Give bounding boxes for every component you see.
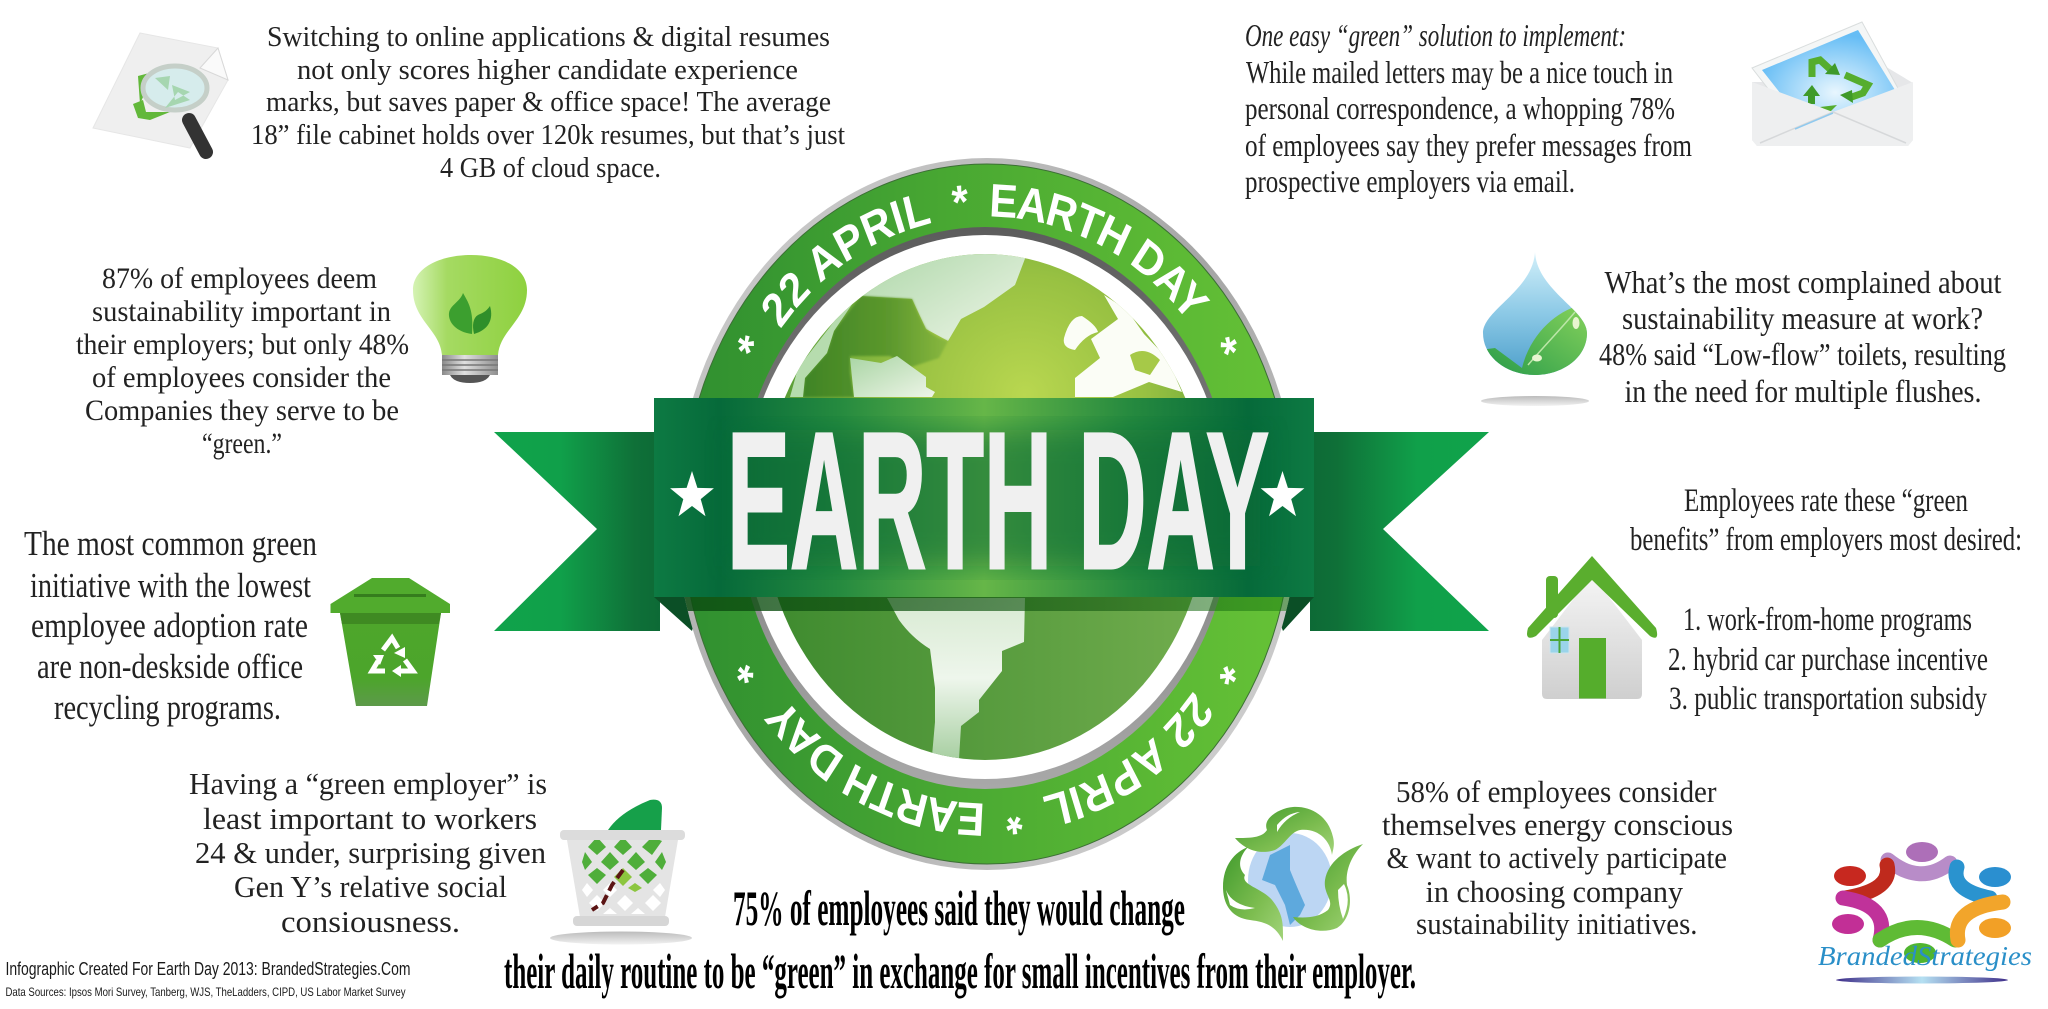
- text block: email solution: personal correspondence, a whopping 78%: [1245, 90, 1675, 126]
- icon: green house: [1527, 556, 1657, 699]
- callout: 75 percent incentive statement: 75% of employees said they would change: [733, 880, 1185, 936]
- text block: low-flow toilets: [1599, 264, 2006, 409]
- text block: online applications: not only scores higher candidate experience: [297, 54, 798, 86]
- icon: envelope with recycling letter: [1752, 22, 1913, 146]
- text block: recycling programs: are non-deskside office: [37, 647, 303, 686]
- text block: recycling programs: The most common green: [24, 524, 317, 563]
- star right: [1261, 471, 1304, 516]
- text block: online applications: [251, 21, 845, 184]
- text block: recycling programs: employee adoption rate: [31, 606, 308, 645]
- ribbon tail left: [494, 432, 660, 631]
- text block: email solution: While mailed letters may be a nice touch in: [1246, 54, 1673, 90]
- callout: 75 percent incentive statement: [504, 880, 1416, 999]
- logo: Branded Strategies: BrandedStrategies: [1818, 941, 2032, 971]
- ring text bottom: *: [737, 664, 754, 684]
- text block: energy conscious: sustainability initiatives.: [1416, 906, 1698, 941]
- ring text bottom: *: [1006, 816, 1022, 834]
- text block: sustainability importance: 87% of employees deem: [102, 262, 377, 295]
- text block: green employer: [189, 766, 547, 939]
- footer: credits: Data Sources: Ipsos Mori Survey, Tanberg, WJS, TheLadders, CIPD, US Labor Market Survey: [6, 985, 406, 999]
- ring text bottom: [737, 664, 1236, 836]
- text block: green benefits: [1630, 483, 2022, 717]
- text block: recycling programs: initiative with the lowest: [30, 566, 311, 605]
- text block: sustainability importance: Companies they serve to be: [85, 394, 399, 427]
- panel: central Earth Day emblem: [494, 158, 1489, 870]
- text block: email solution: [1245, 17, 1692, 199]
- text block: low-flow toilets: What’s the most complained about: [1604, 264, 2002, 300]
- icon: paper with magnifier: [93, 33, 228, 152]
- badge ring: [676, 158, 1298, 870]
- text block: energy conscious: 58% of employees consider: [1396, 774, 1717, 809]
- footer: credits: Infographic Created For Earth Day 2013: BrandedStrategies.Com: [6, 959, 410, 979]
- text block: online applications: Switching to online applications & digital resumes: [267, 21, 830, 53]
- ring text bottom: EARTH DAY: [764, 706, 982, 836]
- text block: online applications: 4 GB of cloud space.: [440, 152, 661, 184]
- text block: recycling programs: recycling programs.: [54, 688, 281, 727]
- ring text top: [738, 184, 1237, 356]
- ring text bottom: 22 APRIL: [1042, 692, 1212, 824]
- text block: recycling programs: [24, 524, 317, 727]
- panel: central Earth Day emblem: EARTH DAY: [727, 392, 1269, 610]
- banner shadow: [660, 597, 1310, 611]
- text block: green employer: consiousness.: [281, 904, 460, 939]
- banner: [654, 398, 1314, 597]
- text block: green employer: Having a “green employer” is: [189, 766, 547, 801]
- ribbon tail right: [1310, 432, 1489, 631]
- icon: recycling bin: [330, 578, 450, 706]
- logo: Branded Strategies: [1818, 842, 2032, 984]
- text block: email solution: One easy “green” solution to implement:: [1245, 17, 1626, 53]
- text block: green employer: 24 & under, surprising given: [195, 835, 546, 870]
- text block: online applications: 18” file cabinet holds over 120k resumes, but that’s just: [251, 119, 845, 151]
- star left: [670, 471, 714, 516]
- text block: online applications: marks, but saves paper & office space! The average: [266, 86, 831, 118]
- text block: energy conscious: [1382, 774, 1733, 941]
- text block: sustainability importance: “green.”: [202, 427, 282, 460]
- ring text top: *: [952, 186, 968, 204]
- icon: earth with recycling leaves: [1223, 807, 1363, 941]
- text block: sustainability importance: [76, 262, 409, 460]
- icon: water drop with leaf: [1480, 252, 1595, 406]
- ring text top: EARTH DAY: [992, 184, 1210, 314]
- text block: energy conscious: in choosing company: [1426, 874, 1683, 909]
- ring text top: *: [738, 335, 754, 354]
- text block: low-flow toilets: in the need for multiple flushes.: [1624, 373, 1982, 409]
- text block: email solution: prospective employers via email.: [1245, 163, 1575, 199]
- text block: sustainability importance: sustainability important in: [92, 295, 391, 328]
- ring text top: *: [1220, 336, 1237, 356]
- text block: sustainability importance: their employers; but only 48%: [76, 328, 409, 361]
- icon: wastebasket: [550, 800, 692, 944]
- text block: energy conscious: & want to actively participate: [1386, 840, 1727, 875]
- ribbon fold right: [1270, 597, 1314, 631]
- ring text bottom: *: [1220, 666, 1236, 685]
- icon: light bulb: [413, 255, 527, 383]
- ring text top: 22 APRIL: [762, 196, 932, 328]
- text block: green employer: least important to workers: [203, 801, 537, 836]
- footer: credits: [6, 959, 410, 999]
- text block: low-flow toilets: sustainability measure at work?: [1622, 300, 1983, 336]
- text block: email solution: of employees say they prefer messages from: [1245, 127, 1692, 163]
- text block: sustainability importance: of employees consider the: [92, 361, 391, 394]
- ribbon fold left: [654, 597, 700, 631]
- globe: [778, 254, 1192, 760]
- text block: energy conscious: themselves energy conscious: [1382, 807, 1733, 842]
- text block: green employer: Gen Y’s relative social: [234, 869, 507, 904]
